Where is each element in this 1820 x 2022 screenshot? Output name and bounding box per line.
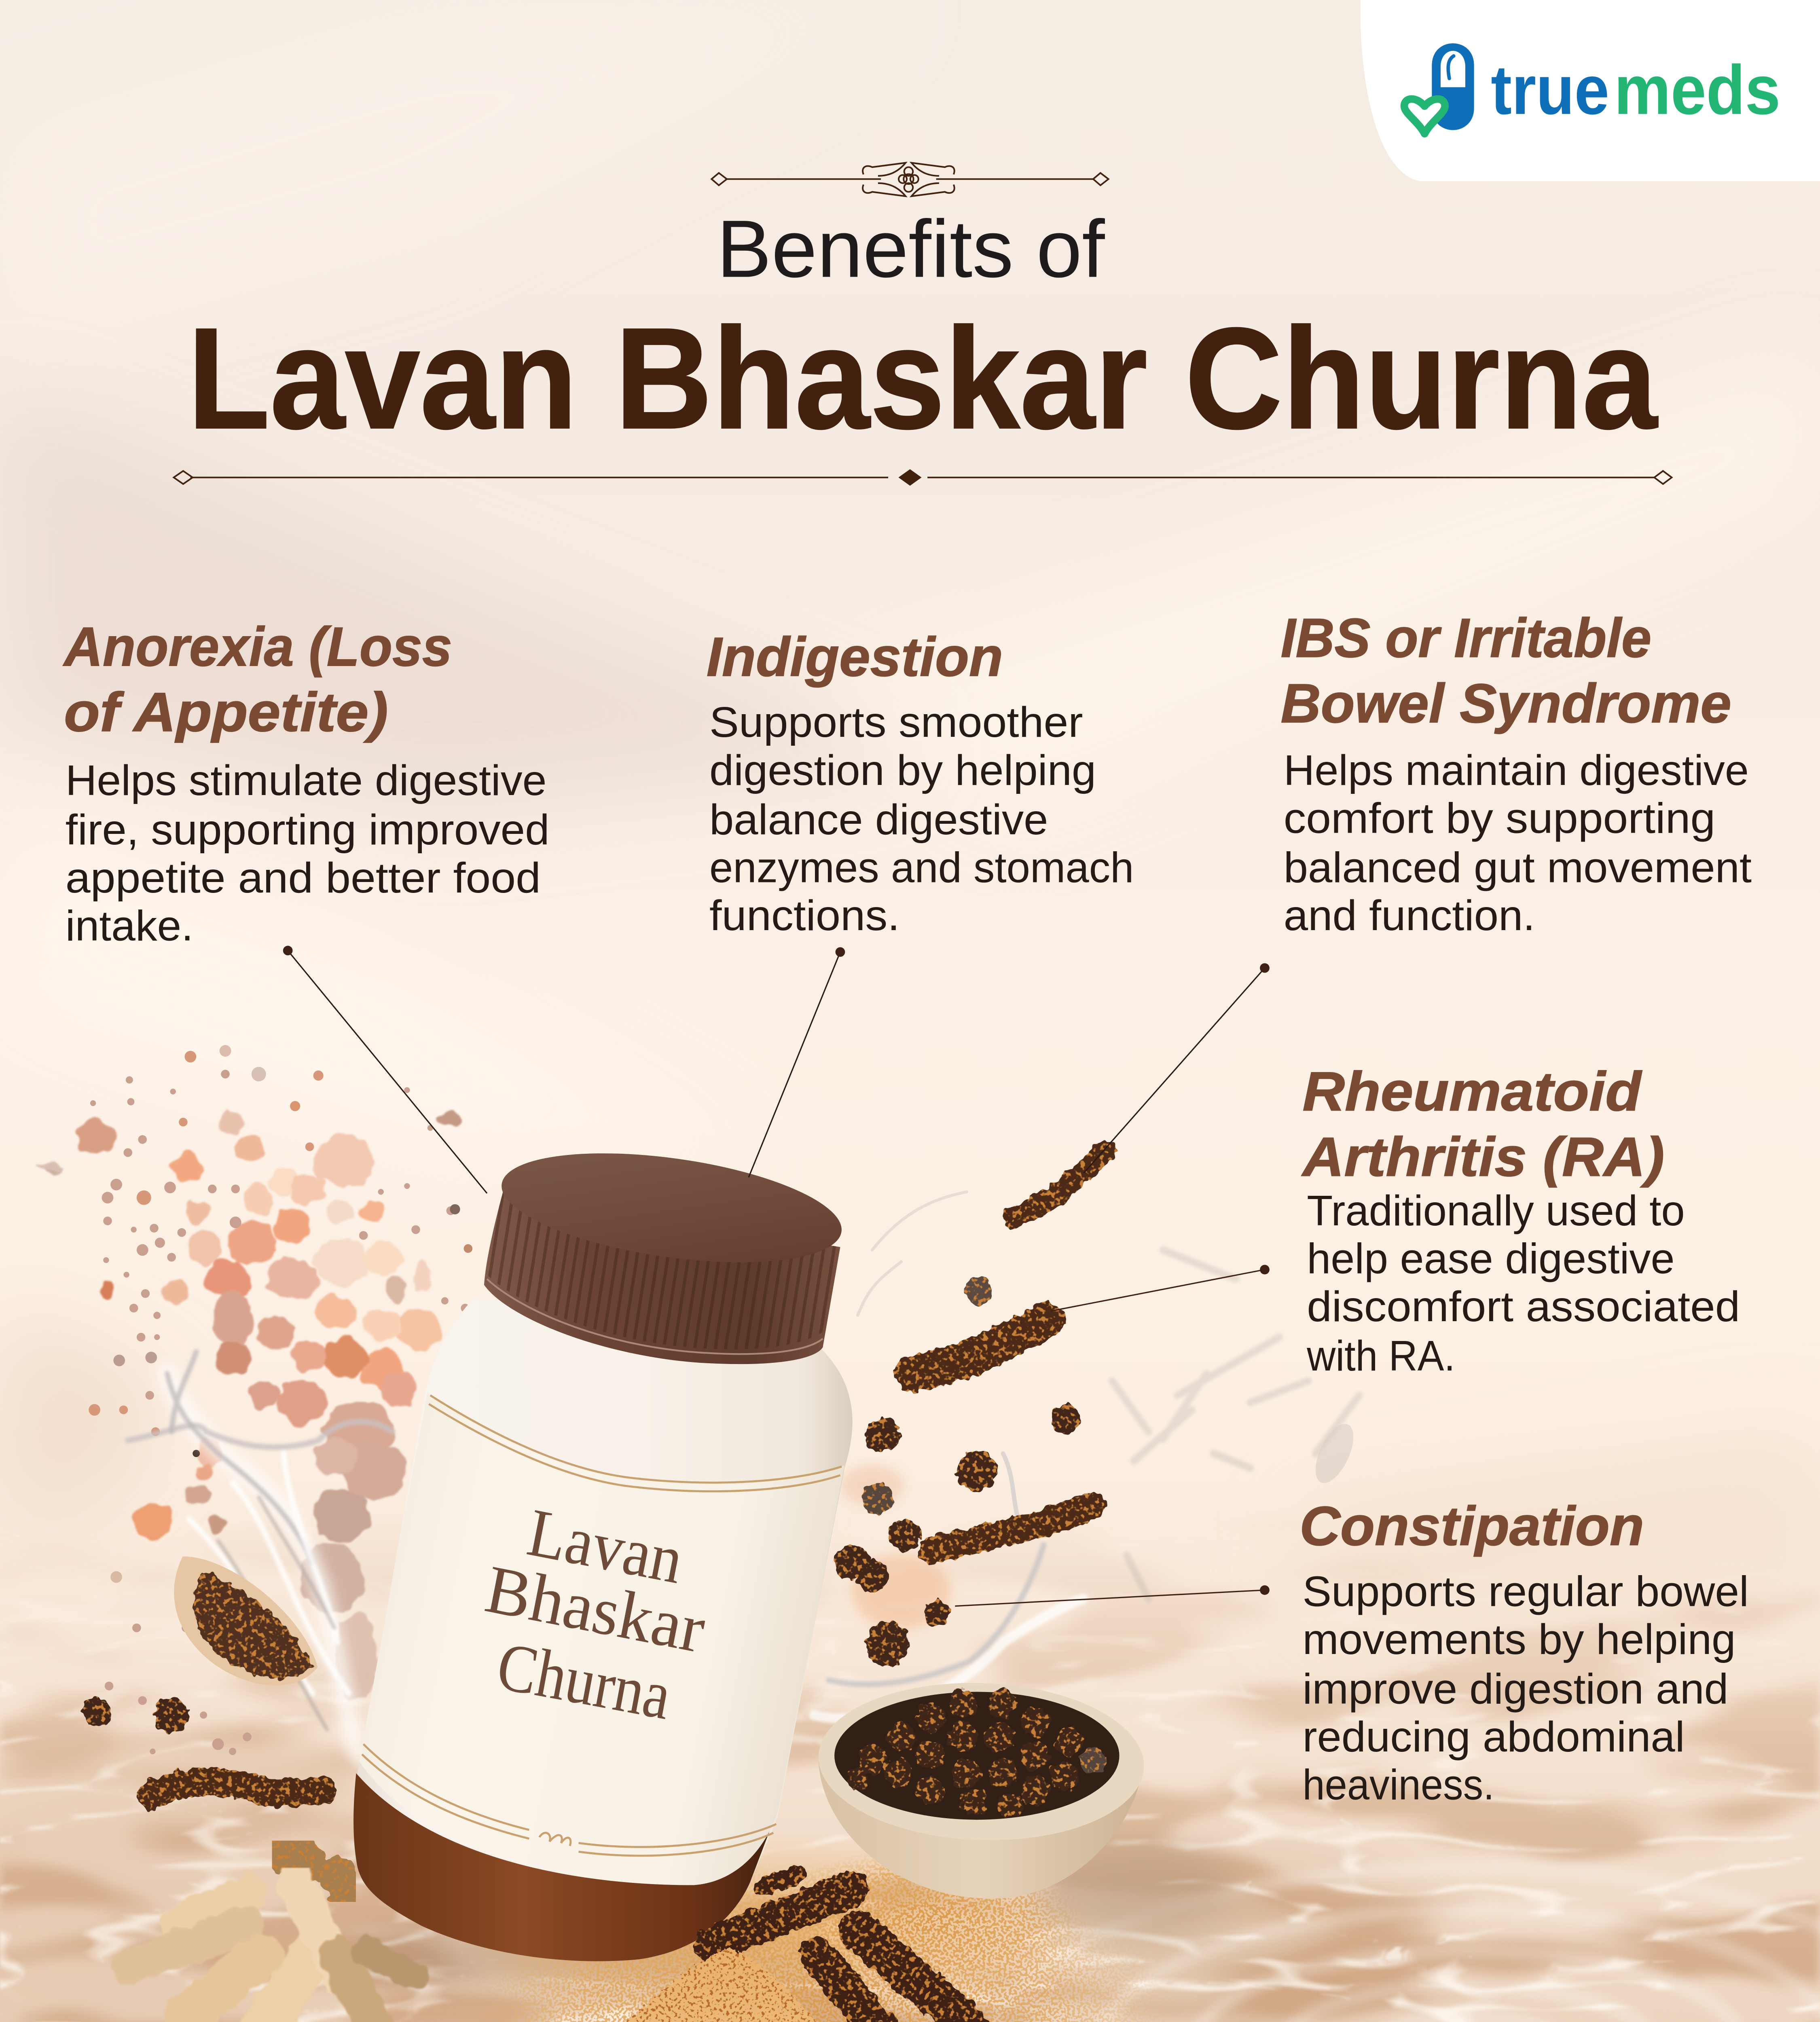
body: Indigestion: Supports smoother (709, 698, 1083, 746)
body: Constipation: reducing abdominal (1302, 1713, 1685, 1761)
water splash left (128, 1352, 392, 1751)
heading: Rheumatoid Arthritis: Rheumatoid (1302, 1060, 1642, 1122)
heading: Constipation: Constipation (1299, 1495, 1644, 1557)
benefit: IBS (1281, 607, 1752, 939)
bowl of peppercorns (816, 1677, 1236, 1936)
leader line: Rheumatoid Arthritis (1051, 1265, 1270, 1311)
heading: IBS: Bowel Syndrome (1281, 672, 1731, 734)
ground shadow under bottle (334, 1923, 829, 1987)
bottle label (359, 1392, 844, 1885)
body: Anorexia (66, 757, 550, 950)
body: Constipation (1302, 1567, 1749, 1809)
body: Indigestion: functions. (709, 892, 900, 939)
icon: capsule and heart (1404, 43, 1474, 134)
leader line: Indigestion (749, 947, 845, 1177)
heading: Anorexia (63, 615, 452, 743)
label gold lines (362, 1395, 842, 1856)
body: Indigestion: digestion by helping (709, 747, 1096, 794)
heading: Rheumatoid Arthritis: Arthritis (RA) (1301, 1126, 1664, 1188)
bottle body (353, 1298, 853, 1961)
body: Rheumatoid Arthritis (1306, 1187, 1740, 1380)
logo wordmark: meds: meds (1614, 51, 1780, 129)
floating spice sticks and peppercorns (83, 1151, 1105, 1795)
salt crystals splash (35, 1110, 464, 1701)
heading: Anorexia: of Appetite) (64, 681, 388, 743)
body: IBS: and function. (1284, 892, 1535, 939)
leader line: Constipation (955, 1585, 1270, 1606)
seed pod (142, 1540, 333, 1715)
bottle label text: Lavan (522, 1494, 689, 1598)
heading: Indigestion: Indigestion (707, 626, 1003, 687)
body: Constipation: improve digestion and (1302, 1665, 1729, 1713)
bottle label text (480, 1494, 711, 1734)
title: Benefits of: Benefits of (717, 203, 1105, 294)
body: IBS (1284, 747, 1752, 939)
bark pieces and powder pile (554, 1875, 971, 2022)
ornament above title (711, 163, 1109, 196)
body: Indigestion: enzymes and stomach (709, 844, 1134, 892)
body: IBS: comfort by supporting (1284, 794, 1715, 842)
spice sticks (151, 1151, 1105, 1795)
water splash right (814, 1192, 1361, 1718)
bottle label text: Churna (491, 1627, 677, 1734)
body: Constipation: Supports regular bowel (1302, 1567, 1749, 1615)
heading: Rheumatoid Arthritis (1301, 1060, 1664, 1188)
title: Lavan Bhaskar Churna: Lavan Bhaskar Churna (188, 298, 1658, 459)
peppercorns (83, 1276, 1080, 1732)
bottle label text: Bhaskar (480, 1550, 711, 1667)
body: IBS: Helps maintain digestive (1284, 747, 1749, 794)
body: Anorexia: Helps stimulate digestive (66, 757, 546, 804)
body: Anorexia: appetite and better food (66, 854, 541, 902)
ornament below title (174, 470, 1672, 485)
leader line: IBS (1084, 963, 1270, 1173)
bottle (353, 1135, 853, 1961)
bottle base (353, 1773, 778, 1961)
salt droplets (89, 1045, 472, 1755)
body: Anorexia: fire, supporting improved (66, 806, 550, 854)
leader line: Anorexia (283, 946, 487, 1193)
bottle cap (484, 1135, 849, 1364)
body: Anorexia: intake. (66, 902, 193, 950)
ginger roots and dried pieces (131, 1846, 414, 2022)
body: Rheumatoid Arthritis: Traditionally used to (1307, 1187, 1685, 1235)
body: Rheumatoid Arthritis: help ease digestive (1307, 1235, 1675, 1282)
heading: IBS: IBS or Irritable (1281, 607, 1651, 669)
benefit: Constipation (1299, 1495, 1749, 1809)
benefit: Rheumatoid Arthritis (1301, 1060, 1740, 1380)
heading: IBS (1281, 607, 1731, 734)
golden powder scatter (436, 1832, 1177, 2022)
body: Constipation: movements by helping (1302, 1616, 1736, 1663)
body: Rheumatoid Arthritis: with RA. (1306, 1332, 1455, 1380)
benefit: Indigestion (707, 626, 1134, 939)
body: Indigestion: balance digestive (709, 796, 1048, 844)
body: IBS: balanced gut movement (1284, 844, 1752, 892)
heading: Anorexia: Anorexia (Loss (63, 615, 452, 677)
body: Constipation: heaviness. (1302, 1761, 1494, 1809)
body: Rheumatoid Arthritis: discomfort associated (1307, 1283, 1740, 1330)
benefit: Anorexia (63, 615, 550, 950)
body: Indigestion (709, 698, 1134, 939)
logo wordmark: true (1491, 51, 1609, 129)
logo panel (1361, 0, 1820, 181)
